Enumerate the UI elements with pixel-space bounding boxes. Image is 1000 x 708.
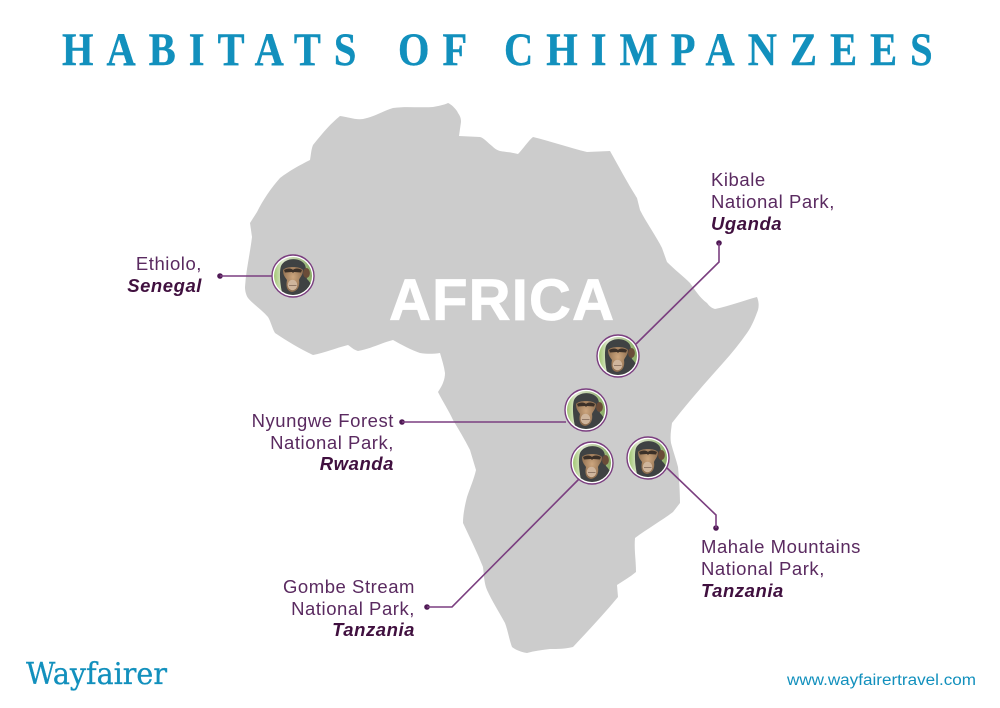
- connector: Uganda: [636, 240, 722, 344]
- logo: Wayfairer: Wayfairer: [26, 657, 168, 692]
- icon: chimpanzee, Uganda: [597, 335, 639, 377]
- map label: Africa: AFRICA: [389, 268, 614, 333]
- label: Nyungwe Forest National Park, Rwanda: [252, 410, 394, 474]
- label: Nyungwe Forest National Park, Rwanda: Rwanda: [320, 453, 394, 474]
- label: Ethiolo, Senegal: Ethiolo,: [136, 253, 202, 274]
- label: Gombe Stream National Park, Tanzania: National Park,: [291, 598, 415, 619]
- icon: chimpanzee, Gombe Stream: [571, 442, 613, 484]
- connector: Rwanda: [399, 419, 566, 425]
- title: CHIMPANZEES: [504, 24, 946, 76]
- icon: chimpanzee, Rwanda: [565, 389, 607, 431]
- title: OF: [398, 24, 480, 76]
- label: Kibale National Park, Uganda: [711, 169, 835, 234]
- label: Gombe Stream National Park, Tanzania: Gombe Stream: [283, 576, 415, 597]
- label: Kibale National Park, Uganda: National Park,: [711, 191, 835, 212]
- connector: Senegal: [217, 273, 272, 279]
- map of Africa: [245, 103, 759, 653]
- icon: chimpanzee, Mahale Mountains: [627, 437, 669, 479]
- label: Ethiolo, Senegal: [127, 253, 202, 296]
- label: Kibale National Park, Uganda: Kibale: [711, 169, 766, 190]
- label: Mahale Mountains National Park, Tanzania: Tanzania: [701, 580, 784, 601]
- website url: www.wayfairertravel.com: [786, 672, 976, 689]
- label: Mahale Mountains National Park, Tanzania: Mahale Mountains: [701, 536, 861, 557]
- label: Mahale Mountains National Park, Tanzania: National Park,: [701, 558, 825, 579]
- label: Nyungwe Forest National Park, Rwanda: National Park,: [270, 432, 394, 453]
- label: Ethiolo, Senegal: Senegal: [127, 275, 202, 296]
- label: Gombe Stream National Park, Tanzania: [283, 576, 415, 640]
- icon: chimpanzee, Senegal: [272, 255, 314, 297]
- label: Mahale Mountains National Park, Tanzania: [701, 536, 861, 601]
- title: [62, 24, 946, 76]
- connector: Mahale Mountains, Tanzania: [666, 467, 719, 531]
- label: Gombe Stream National Park, Tanzania: Tanzania: [332, 619, 415, 640]
- label: Kibale National Park, Uganda: Uganda: [711, 213, 782, 234]
- connector: Gombe Stream, Tanzania: [424, 479, 579, 610]
- label: Nyungwe Forest National Park, Rwanda: Nyungwe Forest: [252, 410, 394, 431]
- title: HABITATS: [62, 24, 369, 76]
